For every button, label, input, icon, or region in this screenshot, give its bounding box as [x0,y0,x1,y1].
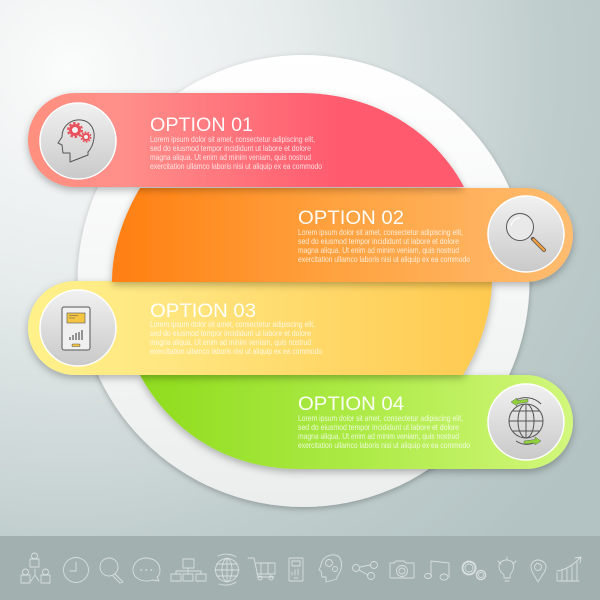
icon: tablet [40,290,116,366]
option 02 body: Lorem ipsum dolor sit amet, consectetur adipiscing elit, [298,228,463,237]
panel: option 04 green [140,375,573,469]
icon: growth chart [557,557,581,581]
option 03 body: sed do eiusmod tempor incididunt ut labore et dolore [150,329,311,338]
option 01 body: exercitation ullamco laboris nisi ut aliquip ex ea commodo [150,162,322,171]
icon: globe [215,554,239,585]
option 01 body: Lorem ipsum dolor sit amet, consectetur adipiscing elit, [150,135,315,144]
panel: option 01 red [28,93,464,187]
option 02 body: exercitation ullamco laboris nisi ut aliquip ex ea commodo [298,255,470,264]
option 03 body [150,320,322,356]
icon: speech bubble [133,558,160,581]
icon: head gears [319,555,341,582]
option 01 body: sed do eiusmod tempor incididunt ut labore et dolore [150,144,311,153]
icon: gears [462,562,486,580]
icon: org chart [171,559,206,581]
option 02 body: sed do eiusmod tempor incididunt ut labore et dolore [298,237,459,246]
icon: camera [390,561,414,578]
white ring [78,55,530,507]
icon: tablet chart [289,558,303,581]
icon: people network [21,553,50,583]
option 03 body: Lorem ipsum dolor sit amet, consectetur adipiscing elit, [150,320,315,329]
option 02 body: magna aliqua. Ut enim ad minim veniam, quis nostrud [298,246,459,255]
icon: light bulb [498,557,516,581]
icon: search [100,558,123,583]
icon: map pin [531,560,546,582]
option 04 body [298,414,470,450]
panel: option 03 yellow [28,281,492,375]
option 04 body: sed do eiusmod tempor incididunt ut labore et dolore [298,423,459,432]
panel: option 02 orange [112,188,573,282]
icon: globe with arrows [488,384,564,460]
icon: music notes [424,561,449,580]
icon: magnifier [488,196,564,272]
option 03 body: magna aliqua. Ut enim ad minim veniam, quis nostrud [150,338,311,347]
icon: share [352,562,378,580]
option 04 body: magna aliqua. Ut enim ad minim veniam, quis nostrud [298,432,459,441]
option 04 body: exercitation ullamco laboris nisi ut aliquip ex ea commodo [298,441,470,450]
option 01 heading: OPTION 01 [150,115,253,136]
option 03 body: exercitation ullamco laboris nisi ut aliquip ex ea commodo [150,347,322,356]
option 02 body [298,228,470,264]
icon: clock [64,558,88,582]
option 04 heading: OPTION 04 [298,394,404,415]
option 01 body: magna aliqua. Ut enim ad minim veniam, quis nostrud [150,153,311,162]
option 03 heading: OPTION 03 [150,301,256,322]
icon: head with gears [40,103,116,179]
option 04 body: Lorem ipsum dolor sit amet, consectetur adipiscing elit, [298,414,463,423]
option 02 heading: OPTION 02 [298,208,404,229]
panel: footer icon strip [0,536,600,600]
option 01 body [150,135,322,171]
icon: shopping cart [248,558,275,580]
